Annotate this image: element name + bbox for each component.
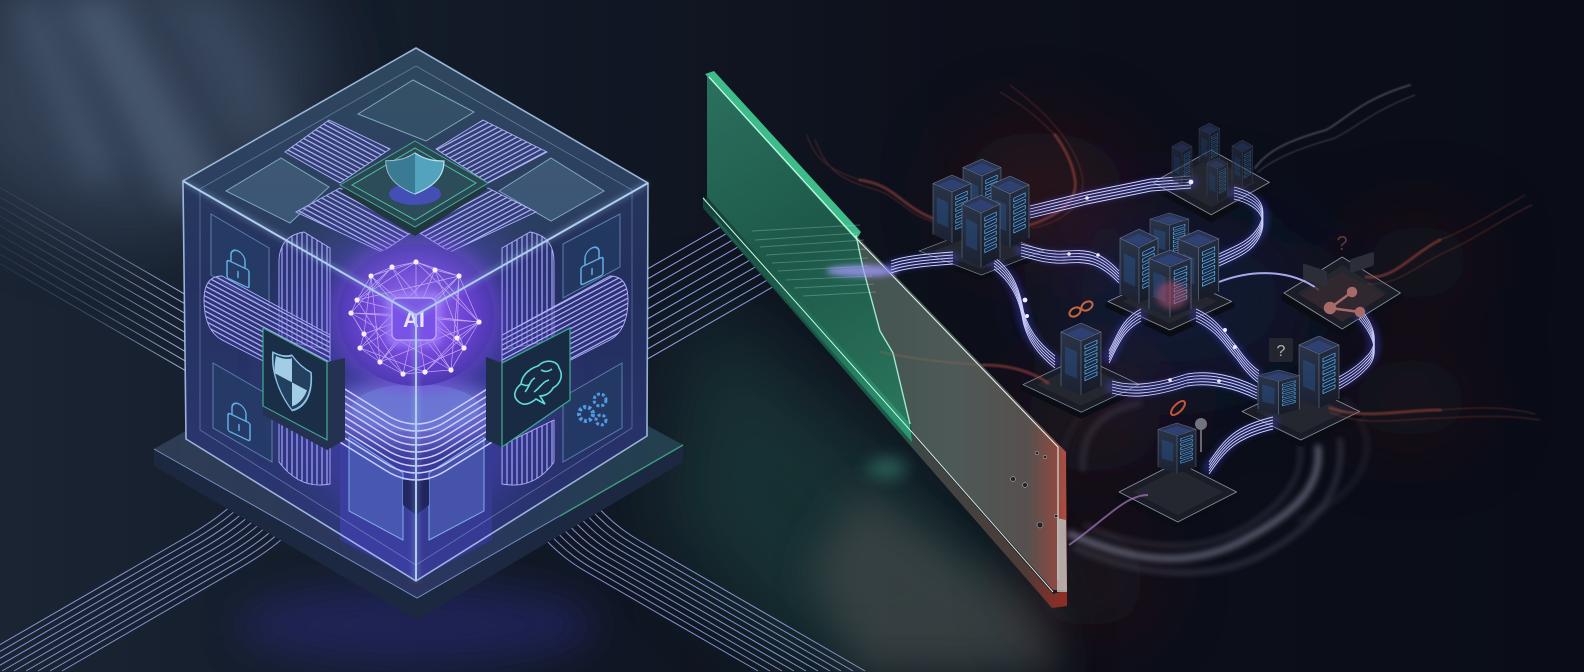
AI sphere bbox=[330, 237, 502, 393]
neural network lines bbox=[351, 262, 479, 374]
network nodes bbox=[348, 259, 482, 377]
wall crack bbox=[856, 235, 910, 424]
wall plinth bbox=[703, 196, 1067, 608]
faint lines through glass bbox=[752, 225, 876, 296]
cube base plate bbox=[154, 300, 683, 667]
server node with question bubble: ? bbox=[1277, 343, 1286, 360]
AI chip bbox=[386, 292, 442, 346]
server node with chain bbox=[1061, 300, 1101, 395]
wires: bottom-right bundle bbox=[524, 484, 865, 671]
stacked server node with pin bbox=[1158, 399, 1207, 473]
stacked disks with chevron lines bbox=[328, 378, 504, 480]
purple light crossing the crack bbox=[826, 265, 898, 277]
wires: left bundle into the cube bbox=[0, 188, 200, 379]
cube interior bbox=[183, 48, 648, 581]
compromised board bbox=[1300, 233, 1385, 322]
glass edges bbox=[183, 48, 648, 581]
top green edge bbox=[705, 71, 861, 240]
compromised board: ? bbox=[1336, 233, 1348, 255]
floor light from the wall bbox=[660, 300, 1060, 672]
server cluster 1 bbox=[933, 159, 1029, 267]
top glass panels bbox=[226, 80, 604, 223]
horizontal stripe bands bbox=[204, 276, 628, 395]
bullet holes bbox=[1011, 451, 1058, 528]
icons: padlocks bbox=[227, 243, 603, 441]
side lock panels bbox=[211, 214, 622, 462]
top stripe pads bbox=[285, 120, 547, 252]
shield panel bbox=[263, 328, 345, 450]
speech bubbles bbox=[1303, 263, 1327, 287]
glass wall bbox=[703, 71, 1067, 608]
red haze behind network bbox=[960, 130, 1480, 630]
wall right glass edge bbox=[1057, 518, 1067, 592]
lower cube chamber bbox=[340, 430, 492, 580]
wires: right bundle toward the wall bbox=[630, 187, 790, 369]
vortex on the floor bbox=[1060, 385, 1367, 573]
lower green glass strip bbox=[703, 197, 912, 442]
interior purple glow bbox=[281, 210, 551, 530]
brain panel bbox=[486, 328, 570, 447]
top shield chip bbox=[340, 141, 488, 236]
icon: broken chain bbox=[1068, 300, 1094, 318]
server cluster 2, ghosted bbox=[1172, 123, 1253, 202]
network platforms bbox=[919, 150, 1400, 526]
light rays top-left bbox=[0, 0, 320, 230]
server cluster 3 bbox=[1120, 213, 1219, 317]
AI chip: AI bbox=[403, 307, 425, 332]
green intact section bbox=[707, 73, 910, 436]
vertical stripe columns bbox=[279, 232, 554, 485]
icon: shield bbox=[273, 345, 311, 421]
icon: chain bbox=[1169, 399, 1187, 417]
glass faces bbox=[183, 48, 648, 581]
red data wisps bbox=[807, 85, 1540, 421]
server node with question bubble bbox=[1258, 336, 1339, 415]
network wires bbox=[891, 176, 1374, 545]
icon: gears bbox=[579, 394, 606, 425]
glass cube bbox=[183, 48, 648, 581]
wall highlight lines bbox=[709, 77, 1058, 580]
wires: bottom-left bundle bbox=[0, 484, 306, 671]
grey damaged section bbox=[856, 235, 1067, 590]
icon: brain bbox=[515, 361, 561, 404]
network light nodes bbox=[1023, 180, 1237, 383]
